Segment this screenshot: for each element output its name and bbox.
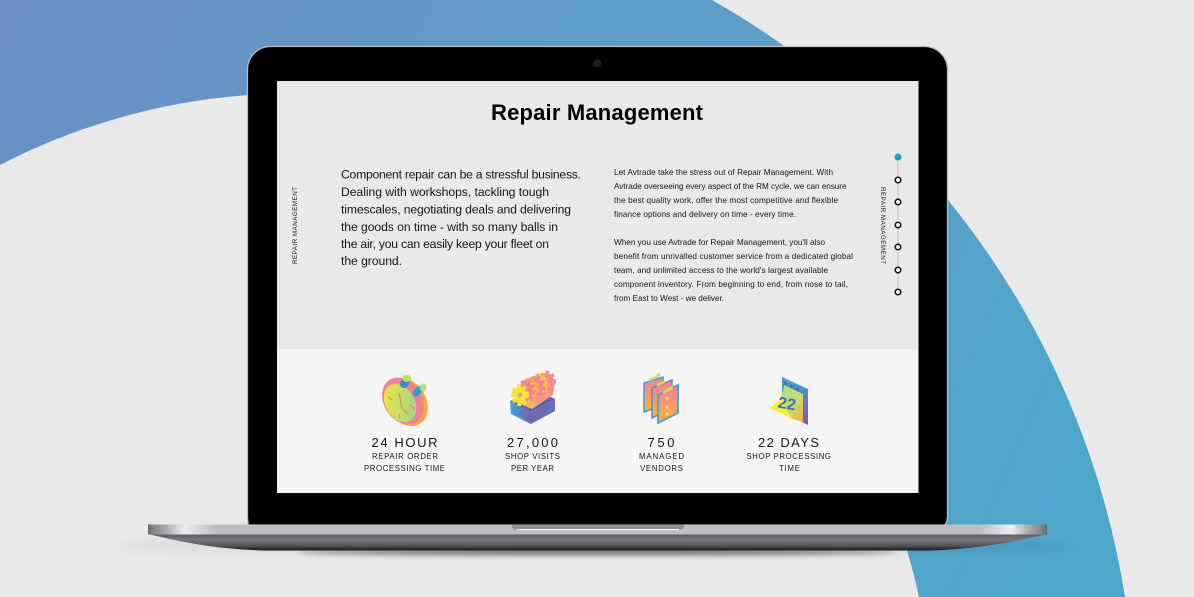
icon: gears in box [510,372,555,424]
stat: 27,000 [505,435,560,473]
stat: 750: MANAGED [639,452,684,461]
detail paragraphs: from East to West - we deliver. [614,294,724,303]
laptop base top [148,524,1047,534]
stat: 27,000: 27,000 [507,435,558,450]
detail paragraphs [614,168,853,303]
stat: 24 hour: PROCESSING TIME [364,464,445,473]
laptop shadow [117,541,1077,555]
stat: 24 hour [364,435,445,473]
laptop base underside [148,534,1047,550]
stat: 22 days: TIME [779,464,800,473]
stat: 22 days: 22 DAYS [758,435,819,450]
intro paragraph: the goods on time - with so many balls in [341,220,558,234]
icon: calendar: 22 [776,395,797,414]
laptop lid bezel [247,46,948,525]
stat: 750: VENDORS [640,464,683,473]
stat: 27,000: SHOP VISITS [505,452,560,461]
icon: clipboards [644,373,678,423]
detail paragraphs: When you use Avtrade for Repair Management, you'll also [614,238,825,247]
icon: calendar [770,377,808,425]
stat: 24 hour: 24 HOUR [372,435,438,450]
stat: 750: 750 [648,435,674,450]
stat: 24 hour: REPAIR ORDER [372,452,438,461]
right vertical label: REPAIR MANAGEMENT [879,187,886,264]
intro paragraph [341,168,581,268]
screen top panel [277,81,918,349]
detail paragraphs: finance options and delivery on time - every time. [614,210,796,219]
detail paragraphs: the best quality work, offer the most competitive and flexible [614,196,838,205]
left vertical label: REPAIR MANAGEMENT [292,187,299,264]
stats panel [277,349,918,493]
detail paragraphs: benefit from unrivalled customer service from a dedicated global [614,252,853,261]
stat: 27,000: PER YEAR [511,464,554,473]
intro paragraph: the ground. [341,254,402,268]
detail paragraphs: component inventory. From beginning to end, from nose to tail, [614,280,848,289]
detail paragraphs: Avtrade overseeing every aspect of the RM cycle, we can ensure [614,182,847,191]
detail paragraphs: team, and unlimited access to the world's largest available [614,266,828,275]
stat: 22 days [746,435,831,473]
icon: stopwatch [374,370,437,434]
stat: 750 [639,435,684,473]
laptop [148,46,1047,550]
stat: 22 days: SHOP PROCESSING [746,452,831,461]
trackpad notch [512,524,684,530]
screen [277,81,918,493]
detail paragraphs: Let Avtrade take the stress out of Repair Management. With [614,168,833,177]
intro paragraph: the air, you can easily keep your fleet on [341,237,549,251]
section navigation dots [894,154,902,295]
intro paragraph: Component repair can be a stressful business. [341,168,581,182]
intro paragraph: timescales, negotiating deals and delivering [341,202,571,216]
title: Repair Management [491,100,704,125]
webcam [593,60,601,68]
intro paragraph: Dealing with workshops, tackling tough [341,185,549,199]
